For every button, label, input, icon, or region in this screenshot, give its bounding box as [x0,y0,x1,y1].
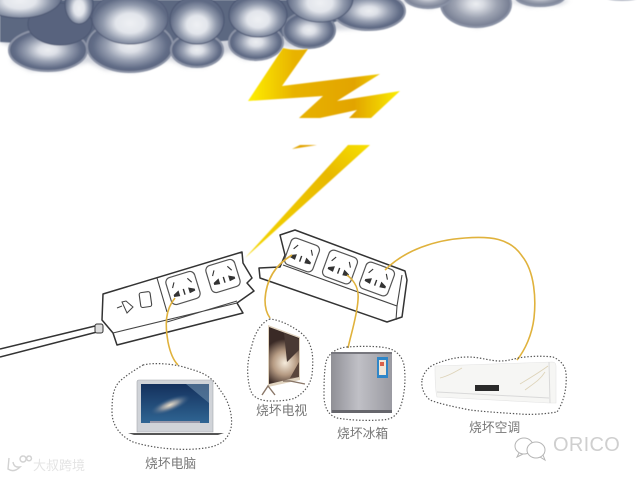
icon: wechat logo [515,438,545,460]
power strip right [259,230,407,322]
device: laptop [112,364,232,449]
label: burnt fridge: 烧坏冰箱 [337,426,388,441]
storm cloud [0,0,638,72]
power strip left [0,252,254,357]
lightning bolt upper [248,48,400,118]
label: burnt TV: 烧坏电视 [256,403,307,418]
device: air conditioner [422,356,566,414]
label: burnt laptop: 烧坏电脑 [145,456,196,471]
left strip sockets [165,258,241,306]
device: TV [248,319,313,401]
device: fridge [324,346,405,420]
watermark: toutiao account: 大叔跨境 [33,458,85,473]
watermark: toutiao account [8,456,85,473]
yellow wires [166,237,535,365]
logo text ORICO: ORICO [553,434,620,456]
right strip sockets [283,237,396,297]
plug icon [117,301,133,313]
cord [0,324,103,357]
label: burnt air conditioner: 烧坏空调 [469,420,520,435]
switch [139,291,152,308]
lightning bolt lower [245,145,370,258]
